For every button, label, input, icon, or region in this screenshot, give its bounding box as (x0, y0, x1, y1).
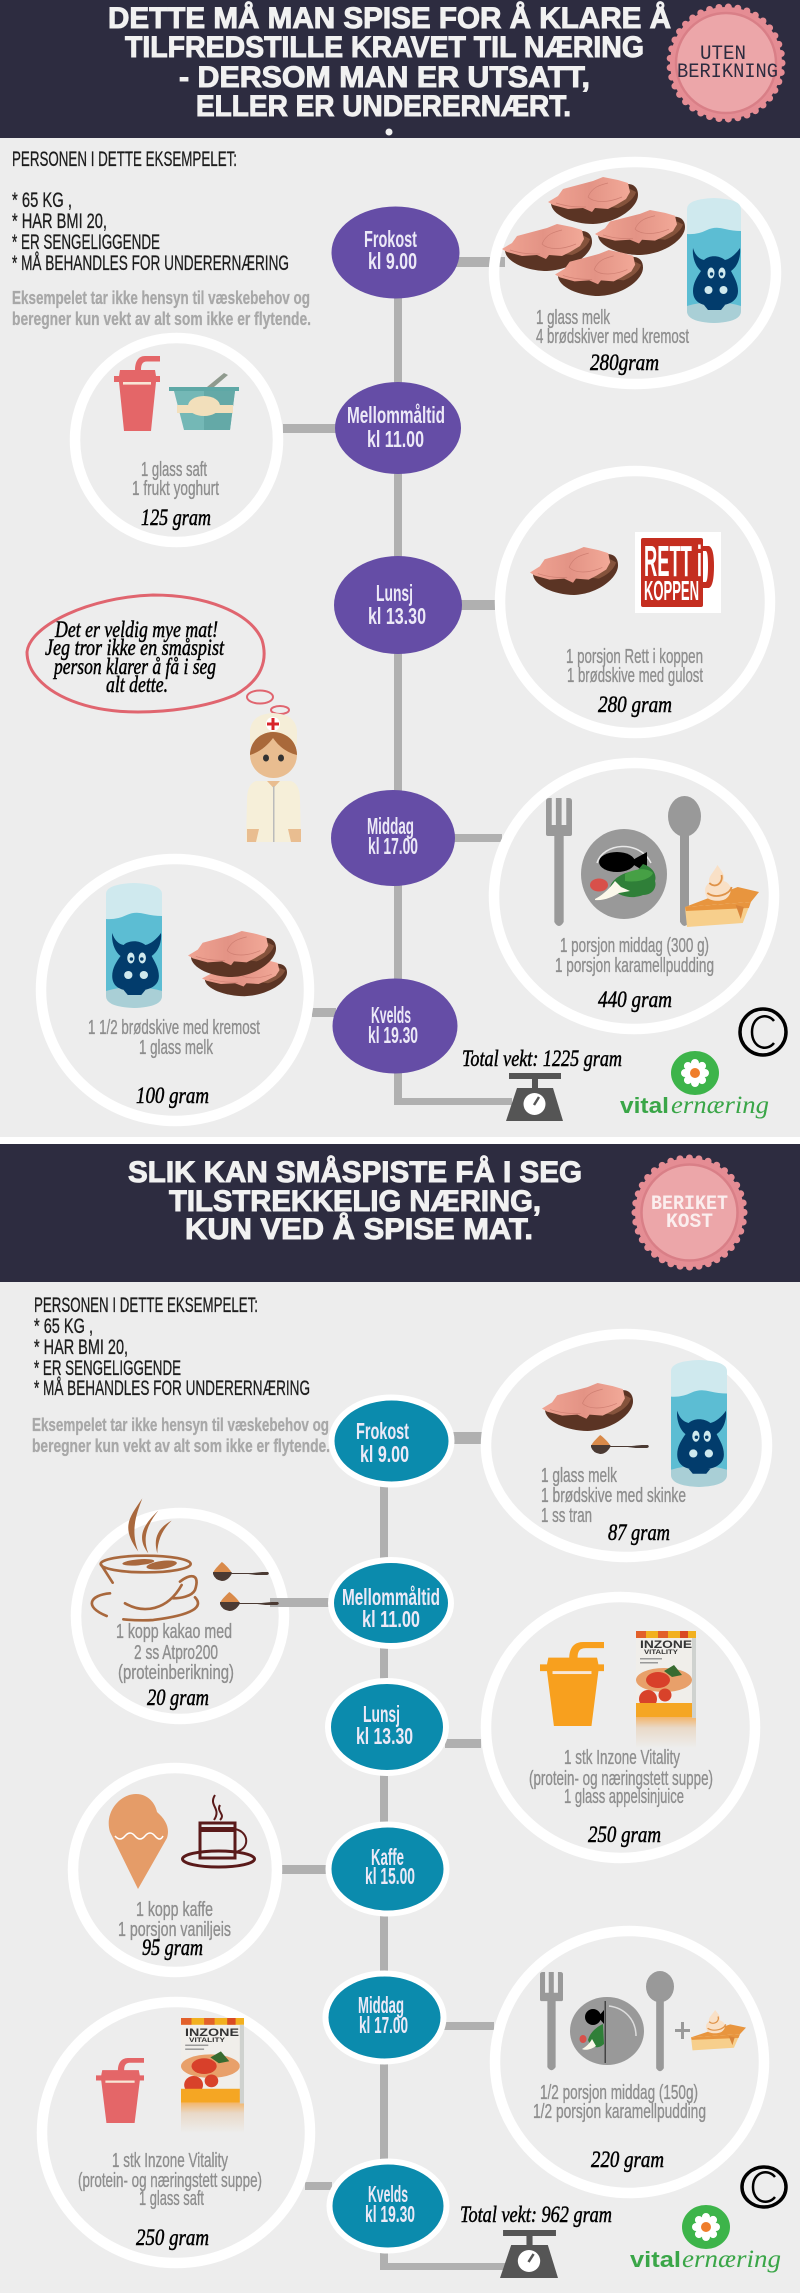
food text: 1 glass melk (536, 306, 610, 329)
food text: 1 kopp kaffe (136, 1898, 213, 1921)
callout: thought bubble (27, 595, 289, 714)
icon: tablespoons (213, 1562, 279, 1611)
food text (132, 458, 219, 500)
food text (566, 645, 703, 687)
icon: tablespoon (591, 1435, 649, 1454)
person description 2: PERSONEN I DETTE EKSEMPELET: (34, 1294, 258, 1317)
food text: 1 porsjon karamellpudding (555, 954, 714, 977)
node: frokost: kl 9.00 (360, 1441, 409, 1467)
badge: beriket kost (635, 1158, 744, 1267)
title 2: TILSTREKKELIG NÆRING, (169, 1185, 541, 1218)
meal: lunsj food circle (486, 1597, 755, 1858)
title 1: TILFREDSTILLE KRAVET TIL NÆRING (125, 31, 644, 64)
logo: vitalernæring 1: vital (620, 1093, 669, 1118)
node: kaffe: Kaffe (371, 1844, 404, 1870)
node: mellommåltid: kl 11.00 (367, 426, 424, 452)
node: middag: kl 17.00 (359, 2012, 408, 2038)
node: frokost (332, 206, 460, 298)
icon: milk glass (671, 1360, 727, 1487)
person description 1: * HAR BMI 20, (12, 210, 107, 233)
title 1: - DERSOM MAN ER UTSATT, (179, 61, 590, 94)
person description 2: * 65 KG , (34, 1315, 93, 1338)
meal: lunsj food circle (500, 471, 770, 733)
food text: 1 glass melk (541, 1464, 617, 1487)
node: kvelds: kl 19.30 (368, 1022, 418, 1048)
icon: orange cup (540, 1642, 604, 1726)
icon: bread slices (502, 177, 685, 296)
node: kvelds: Kvelds (368, 2181, 408, 2207)
icon: saft cup (114, 356, 160, 431)
food text (533, 2081, 706, 2123)
section 2: beriket kost (0, 1144, 800, 2278)
icon: spoon (668, 796, 701, 926)
icon: scale 2 (500, 2230, 558, 2278)
food text (536, 306, 689, 348)
icon: bread slice (530, 547, 618, 595)
food text (118, 1898, 231, 1941)
title 1: DETTE MÅ MAN SPISE FOR Å KLARE Å (108, 2, 671, 35)
node: lunsj: Lunsj (376, 580, 413, 606)
logo: vitalernæring 2: ernæring (682, 2246, 781, 2273)
person description 1: * MÅ BEHANDLES FOR UNDERERNÆRING (12, 252, 289, 275)
node: lunsj (334, 556, 462, 654)
title 1: ELLER ER UNDERERNÆRT. (196, 90, 571, 123)
icon: bread stack (188, 931, 287, 996)
node: kvelds (330, 2162, 446, 2250)
icon: rett i koppen logo: RETT i (644, 537, 702, 586)
note 2: Eksempelet tar ikke hensyn til væskebehov og (32, 1414, 329, 1435)
note 2 (32, 1414, 330, 1456)
icon: copyright 1 (740, 1009, 786, 1055)
node: kaffe: kl 15.00 (365, 1863, 415, 1889)
header band 1 (0, 0, 800, 138)
icon: inzone vitality carton (181, 2018, 244, 2133)
person description 2: * ER SENGELIGGENDE (34, 1357, 181, 1380)
icon: fork (540, 1972, 563, 2070)
callout: thought bubble: Jeg tror ikke en småspist (45, 635, 224, 660)
title 2: KUN VED Å SPISE MAT. (185, 1213, 533, 1246)
food text: 1/2 porsjon karamellpudding (533, 2100, 706, 2123)
icon: milk glass (687, 198, 741, 323)
node: lunsj: kl 13.30 (356, 1723, 413, 1749)
badge: beriket kost: BERIKET (651, 1193, 728, 1216)
icon: spoon (646, 1971, 674, 2071)
callout: thought bubble: person klarer å få i seg (52, 654, 216, 679)
weight: 280 gram (598, 692, 672, 717)
icon: yoghurt (169, 373, 239, 430)
node: frokost: Frokost (356, 1418, 409, 1444)
badge: uten berikning (670, 7, 782, 119)
weight: 280gram (590, 350, 659, 375)
icon: inzone vitality carton: INZONE (185, 2027, 239, 2039)
food text: 1 porsjon Rett i koppen (566, 645, 703, 668)
node: frokost (332, 1398, 452, 1484)
food text: 1 ss tran (541, 1504, 592, 1527)
node: mellommåltid: Mellommåltid (342, 1584, 440, 1610)
meal: kvelds food circle (42, 2002, 310, 2263)
icon: coffee cup (182, 1795, 254, 1867)
person description 1: PERSONEN I DETTE EKSEMPELET: (12, 148, 237, 171)
node: middag (331, 790, 455, 886)
callout: thought bubble: Det er veldig mye mat! (54, 617, 218, 642)
food text: 1 frukt yoghurt (132, 477, 219, 500)
food text: 1 glass saft (139, 2187, 204, 2210)
node: frokost: Frokost (364, 226, 417, 252)
weight: 95 gram (142, 1935, 203, 1960)
icon: ice cream (109, 1794, 168, 1889)
meal: kvelds food circle (41, 859, 309, 1121)
node: lunsj: kl 13.30 (368, 603, 426, 629)
food text: 1/2 porsjon middag (150g) (540, 2081, 698, 2104)
icon: milk glass (106, 883, 162, 1008)
weight: 250 gram (136, 2225, 209, 2250)
logo: vitalernæring 2 (630, 2205, 781, 2273)
node: mellommåltid: Mellommåltid (347, 402, 445, 428)
food text: 1 porsjon middag (300 g) (560, 934, 709, 957)
node: kvelds: Kvelds (371, 1002, 411, 1028)
person description 2: * MÅ BEHANDLES FOR UNDERERNÆRING (34, 1377, 310, 1400)
food text: 1 porsjon vaniljeis (118, 1918, 231, 1941)
total weight 2: Total vekt: 962 gram (460, 2202, 612, 2227)
person description 2 (34, 1294, 310, 1400)
node: kvelds (332, 978, 458, 1074)
plus sign (675, 2022, 690, 2039)
weight: 250 gram (588, 1822, 661, 1847)
node: mellommåltid (331, 1560, 451, 1646)
food text (88, 1016, 260, 1059)
icon: bread slice (542, 1383, 633, 1431)
icon: inzone vitality carton: INZONE (640, 1639, 692, 1651)
icon: coffee cup with steam (92, 1498, 198, 1620)
node: middag: kl 17.00 (368, 833, 418, 859)
title 2: SLIK KAN SMÅSPISTE FÅ I SEG (128, 1156, 582, 1189)
node: lunsj: Lunsj (363, 1701, 400, 1727)
logo: vitalernæring 1 (620, 1051, 769, 1119)
note 1: Eksempelet tar ikke hensyn til væskebehov og (12, 287, 310, 308)
icon: rett i koppen logo: KOPPEN (644, 575, 699, 606)
meal: frokost food circle (494, 162, 776, 384)
icon: scale 1 (506, 1073, 563, 1121)
weight: 100 gram (136, 1083, 209, 1108)
note 1: beregner kun vekt av alt som ikke er flytende. (12, 308, 311, 329)
food text (529, 1746, 713, 1808)
icon: inzone vitality carton (636, 1631, 696, 1748)
section 1: uten berikning (0, 0, 800, 1121)
weight: 125 gram (141, 505, 211, 530)
weight: 440 gram (598, 987, 672, 1012)
food text: 4 brødskiver med kremost (536, 325, 689, 348)
node: kaffe (328, 1824, 446, 1914)
node: middag: Middag (367, 813, 414, 839)
node: frokost: kl 9.00 (368, 248, 417, 274)
food text (541, 1464, 686, 1527)
person description 1: * 65 KG , (12, 189, 72, 212)
weight: 87 gram (608, 1520, 670, 1545)
food text: 2 ss Atpro200 (134, 1641, 218, 1664)
meal: mellommåltid food circle (76, 1498, 332, 1719)
food text: 1 brødskive med skinke (541, 1484, 686, 1507)
icon: caramel pudding (691, 2010, 746, 2050)
logo: vitalernæring 1: ernæring (671, 1092, 769, 1119)
node: mellommåltid (335, 382, 461, 474)
food text: 1 kopp kakao med (116, 1620, 232, 1643)
node: middag (326, 1974, 444, 2062)
section divider (0, 1137, 800, 1144)
icon: fork (546, 798, 572, 926)
node: lunsj (328, 1681, 446, 1773)
food text: (protein- og næringstett suppe) (78, 2169, 262, 2192)
weight: 220 gram (591, 2147, 664, 2172)
timeline connectors 2 (282, 1432, 505, 2270)
person description 1: * ER SENGELIGGENDE (12, 231, 160, 254)
meal: mellommåltid food circle (75, 338, 278, 542)
food text: 1 glass appelsinjuice (564, 1785, 684, 1808)
note 1 (12, 287, 311, 329)
weight: 20 gram (147, 1685, 209, 1710)
icon: inzone vitality carton: VITALITY (189, 2038, 225, 2044)
food text: 1 stk Inzone Vitality (112, 2149, 228, 2172)
food text (78, 2149, 262, 2210)
food text: 1 glass saft (141, 458, 207, 481)
header band 2 (0, 1144, 800, 1282)
food text (116, 1620, 234, 1684)
icon: half plate (570, 1997, 644, 2065)
icon: dinner plate (581, 829, 667, 919)
icon: inzone vitality carton: VITALITY (644, 1650, 678, 1656)
callout: thought bubble: alt dette. (106, 672, 168, 697)
meal: kaffe food circle (73, 1768, 277, 1972)
person description 2: * HAR BMI 20, (34, 1336, 128, 1359)
note 2: beregner kun vekt av alt som ikke er flytende. (32, 1435, 330, 1456)
food text: 1 1/2 brødskive med kremost (88, 1016, 260, 1039)
food text: 1 glass melk (139, 1036, 213, 1059)
logo: vitalernæring 2: vital (630, 2247, 681, 2272)
node: kvelds: kl 19.30 (365, 2201, 415, 2227)
icon: nurse (246, 713, 301, 842)
meal: frokost food circle (486, 1334, 767, 1557)
badge: uten berikning: UTEN (700, 43, 746, 66)
timeline connectors 1 (283, 257, 512, 1105)
meal: middag food circle (495, 1931, 764, 2193)
food text: (proteinberikning) (118, 1661, 234, 1684)
meal: middag food circle (494, 763, 774, 1029)
title 2 (128, 1156, 582, 1246)
food text: 1 stk Inzone Vitality (564, 1746, 680, 1769)
icon: saft cup (96, 2058, 144, 2123)
node: mellommåltid: kl 11.00 (362, 1606, 420, 1632)
title 1 (108, 2, 671, 136)
node: middag: Middag (358, 1992, 404, 2018)
food text (555, 934, 714, 977)
icon: copyright 2 (742, 2167, 786, 2207)
icon: rett i koppen logo (635, 532, 721, 613)
total weight 1: Total vekt: 1225 gram (462, 1046, 622, 1071)
food text: 1 brødskive med gulost (567, 664, 703, 687)
badge: uten berikning: BERIKNING (677, 61, 778, 84)
badge: beriket kost: KOST (666, 1211, 713, 1234)
icon: caramel pudding (685, 865, 759, 927)
person description 1 (12, 148, 289, 275)
